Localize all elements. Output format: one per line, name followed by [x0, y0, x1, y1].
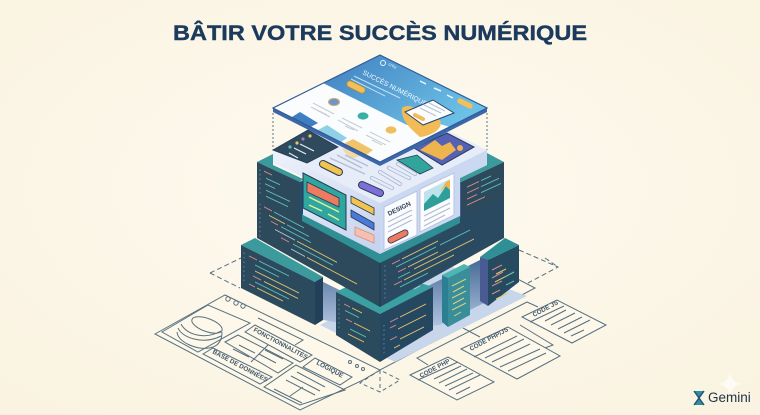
floating card [405, 100, 454, 125]
logo: gemini: Gemini [708, 390, 751, 405]
doc: code php/js: CODE PHP/JS [469, 326, 510, 353]
lower left code block [241, 238, 323, 325]
plan labels: BASE DE DONNÉES [211, 347, 270, 384]
yellow button [351, 196, 374, 215]
doc: code php: CODE PHP [419, 358, 452, 380]
upper large code block [257, 162, 504, 307]
bottom tiles [292, 112, 373, 158]
outline pills [372, 164, 415, 188]
front code block [336, 270, 433, 362]
text lines on cube [330, 155, 368, 174]
hero button [350, 84, 362, 90]
icon: database cylinder [177, 313, 224, 348]
upper right code block [457, 153, 504, 217]
infographic canvas [154, 20, 750, 410]
watermark sparkle [719, 373, 741, 395]
plan labels [211, 325, 344, 384]
top image tile [414, 133, 474, 165]
logo [380, 60, 386, 66]
panel: design cube [273, 97, 487, 254]
feature text lines [311, 103, 390, 145]
title: BÂTIR VOTRE SUCCÈS NUMÉRIQUE [173, 21, 587, 45]
teal chip [397, 155, 433, 174]
orange pill [323, 164, 339, 172]
teal card [303, 173, 346, 230]
middle pillar block [442, 264, 470, 327]
nav button [460, 101, 470, 106]
panel: website screen [273, 55, 487, 166]
shaded core under the stack [315, 255, 490, 330]
panel: website screen: créo [388, 61, 398, 70]
back pillar block [480, 238, 519, 306]
doc: code js [522, 299, 606, 343]
orange blob [402, 106, 441, 137]
panel: design cube: DESIGN [387, 200, 413, 218]
pink button [355, 227, 374, 243]
block shadow base [320, 262, 527, 362]
blue button [351, 210, 374, 230]
plan labels: LOGIQUE [315, 360, 344, 380]
connector lines to code docs [417, 302, 553, 365]
feature icons [328, 98, 340, 106]
design card [384, 191, 417, 250]
purple pill [362, 185, 380, 193]
nav items [420, 81, 453, 98]
hero heading: SUCCÈS NUMÉRIQUE [361, 68, 429, 108]
doc: code php [410, 357, 494, 400]
image card [420, 173, 454, 232]
doc: code php/js [461, 326, 560, 379]
wireframe plan: ground sheet [155, 250, 558, 410]
faded orange tile under the screen [342, 146, 360, 159]
dashed connectors [273, 113, 487, 150]
doc: code js: CODE JS [532, 299, 560, 319]
dark code panel [273, 130, 338, 163]
plan labels: FONCTIONNALITÉS [252, 325, 310, 361]
upper left code block [257, 154, 304, 217]
teal ledge [302, 214, 460, 263]
